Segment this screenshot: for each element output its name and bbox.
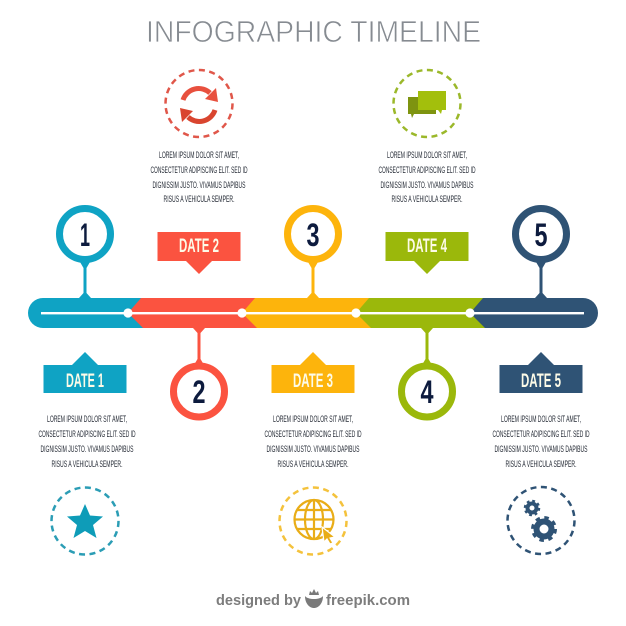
text block: step 4: RISUS A VEHICULA SEMPER. (392, 194, 462, 204)
pin 1: 1 (80, 217, 90, 253)
segment 3 (242, 298, 385, 328)
date label 1 (44, 352, 126, 393)
text block: step 3 (264, 414, 362, 469)
text block: step 2: RISUS A VEHICULA SEMPER. (164, 194, 234, 204)
footer credit (216, 589, 410, 609)
date label 2 (158, 232, 240, 274)
pin 3 (288, 208, 338, 298)
date label 3: DATE 3 (293, 371, 333, 392)
date label 5 (500, 352, 582, 393)
text block: step 4: LOREM IPSUM DOLOR SIT AMET, (387, 150, 467, 160)
text block: step 2: CONSECTETUR ADIPISCING ELIT. SED ID (150, 165, 248, 175)
footer credit: designed by (216, 592, 302, 609)
text block: step 4: DIGNISSIM JUSTO. VIVAMUS DAPIBUS (380, 180, 474, 190)
pin 3: 3 (306, 217, 320, 253)
segment 5 (470, 298, 598, 328)
pin 4 (402, 328, 452, 417)
text block: step 3: DIGNISSIM JUSTO. VIVAMUS DAPIBUS (266, 444, 360, 454)
date label 5: DATE 5 (521, 371, 561, 392)
text block: step 1 (38, 414, 136, 469)
timeline bar (28, 298, 598, 328)
text block: step 1: DIGNISSIM JUSTO. VIVAMUS DAPIBUS (40, 444, 134, 454)
text block: step 4: CONSECTETUR ADIPISCING ELIT. SED ID (378, 165, 476, 175)
icon: star (52, 488, 118, 554)
pin 2 (174, 328, 224, 417)
footer credit: freepik.com (326, 592, 410, 609)
center line (41, 308, 584, 318)
date label 4: DATE 4 (407, 236, 447, 257)
text block: step 1: RISUS A VEHICULA SEMPER. (52, 459, 122, 469)
pin 5: 5 (534, 217, 548, 253)
text block: step 2: LOREM IPSUM DOLOR SIT AMET, (159, 150, 239, 160)
date label 2: DATE 2 (179, 236, 219, 257)
text block: step 4 (378, 150, 476, 204)
segment 4 (356, 298, 500, 328)
text block: step 3: LOREM IPSUM DOLOR SIT AMET, (273, 414, 353, 424)
date label 3 (272, 352, 354, 393)
icon: refresh arrows (166, 70, 232, 137)
text block: step 2 (150, 150, 248, 204)
text block: step 2: DIGNISSIM JUSTO. VIVAMUS DAPIBUS (152, 180, 246, 190)
date label 4 (386, 232, 468, 274)
text block: step 5: RISUS A VEHICULA SEMPER. (506, 459, 576, 469)
text block: step 3: RISUS A VEHICULA SEMPER. (278, 459, 348, 469)
text block: step 5 (492, 414, 590, 469)
pin 4: 4 (420, 374, 434, 410)
pin 5 (516, 208, 566, 298)
segment 2 (128, 298, 270, 328)
text block: step 3: CONSECTETUR ADIPISCING ELIT. SED ID (264, 429, 362, 439)
icon: speech bubbles (394, 70, 460, 137)
title: INFOGRAPHIC TIMELINE (146, 14, 481, 49)
icon: globe with cursor (280, 488, 346, 554)
pin 2: 2 (192, 374, 206, 410)
icon: gears (508, 487, 574, 554)
date label 1: DATE 1 (66, 371, 104, 392)
text block: step 1: CONSECTETUR ADIPISCING ELIT. SED ID (38, 429, 136, 439)
text block: step 1: LOREM IPSUM DOLOR SIT AMET, (47, 414, 127, 424)
pin 1 (60, 208, 110, 298)
segment 1 (28, 298, 160, 328)
